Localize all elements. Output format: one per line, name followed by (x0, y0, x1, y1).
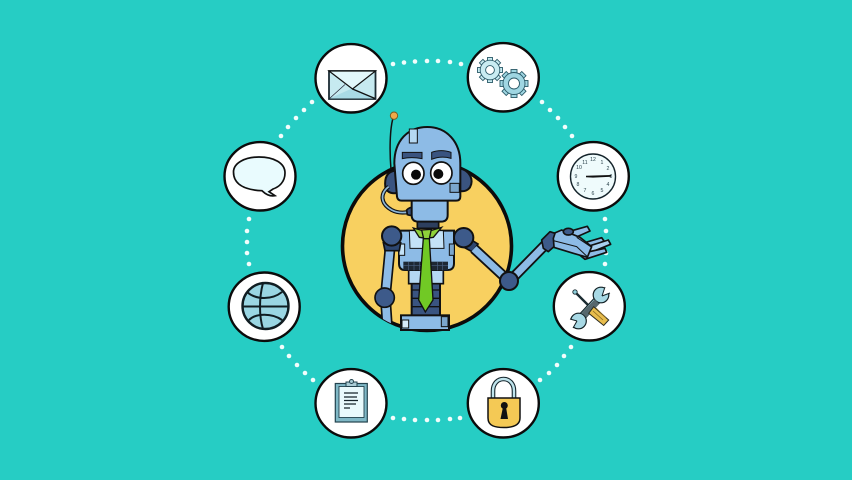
icon: wall clock: 4 (607, 182, 610, 188)
right arm (474, 244, 546, 290)
icon: wall clock: 8 (577, 182, 580, 188)
icon: speech bubble (224, 142, 296, 210)
icon: gears (468, 43, 539, 111)
icon: wrench and screwdriver (554, 272, 625, 340)
icon: wall clock: 3 (610, 174, 613, 180)
robot (375, 112, 611, 330)
icon: globe (229, 272, 300, 341)
icon: wall clock: 6 (592, 191, 595, 197)
icon: wall clock: 9 (575, 174, 578, 180)
icon: wall clock: 7 (584, 188, 587, 194)
head (394, 127, 460, 201)
neck (412, 200, 448, 228)
infographic canvas (223, 42, 630, 439)
robot hand (542, 226, 611, 259)
small gear (478, 58, 502, 82)
torso (399, 231, 454, 284)
antenna (390, 112, 398, 170)
dotted ring connecting icons (245, 59, 608, 422)
headset (382, 168, 472, 215)
green tie (413, 227, 442, 312)
icon: wall clock (558, 142, 629, 210)
icon: wall clock: 5 (601, 188, 604, 194)
icon: padlock (468, 369, 539, 437)
yellow disc behind robot (342, 162, 512, 330)
icon: envelope (316, 44, 386, 112)
icon: clipboard (316, 369, 386, 437)
icon: wall clock: 12 (590, 157, 596, 163)
left arm (375, 248, 394, 327)
icon: wall clock: 10 (576, 165, 582, 171)
eyebrows (402, 151, 451, 159)
icon: wall clock: 1 (601, 160, 604, 166)
large gear (500, 70, 528, 98)
icon: wall clock: 2 (607, 166, 610, 172)
spine and pelvis (401, 280, 449, 330)
eyes (403, 162, 452, 184)
icon: wall clock: 11 (582, 160, 588, 166)
shoulders (382, 226, 478, 252)
